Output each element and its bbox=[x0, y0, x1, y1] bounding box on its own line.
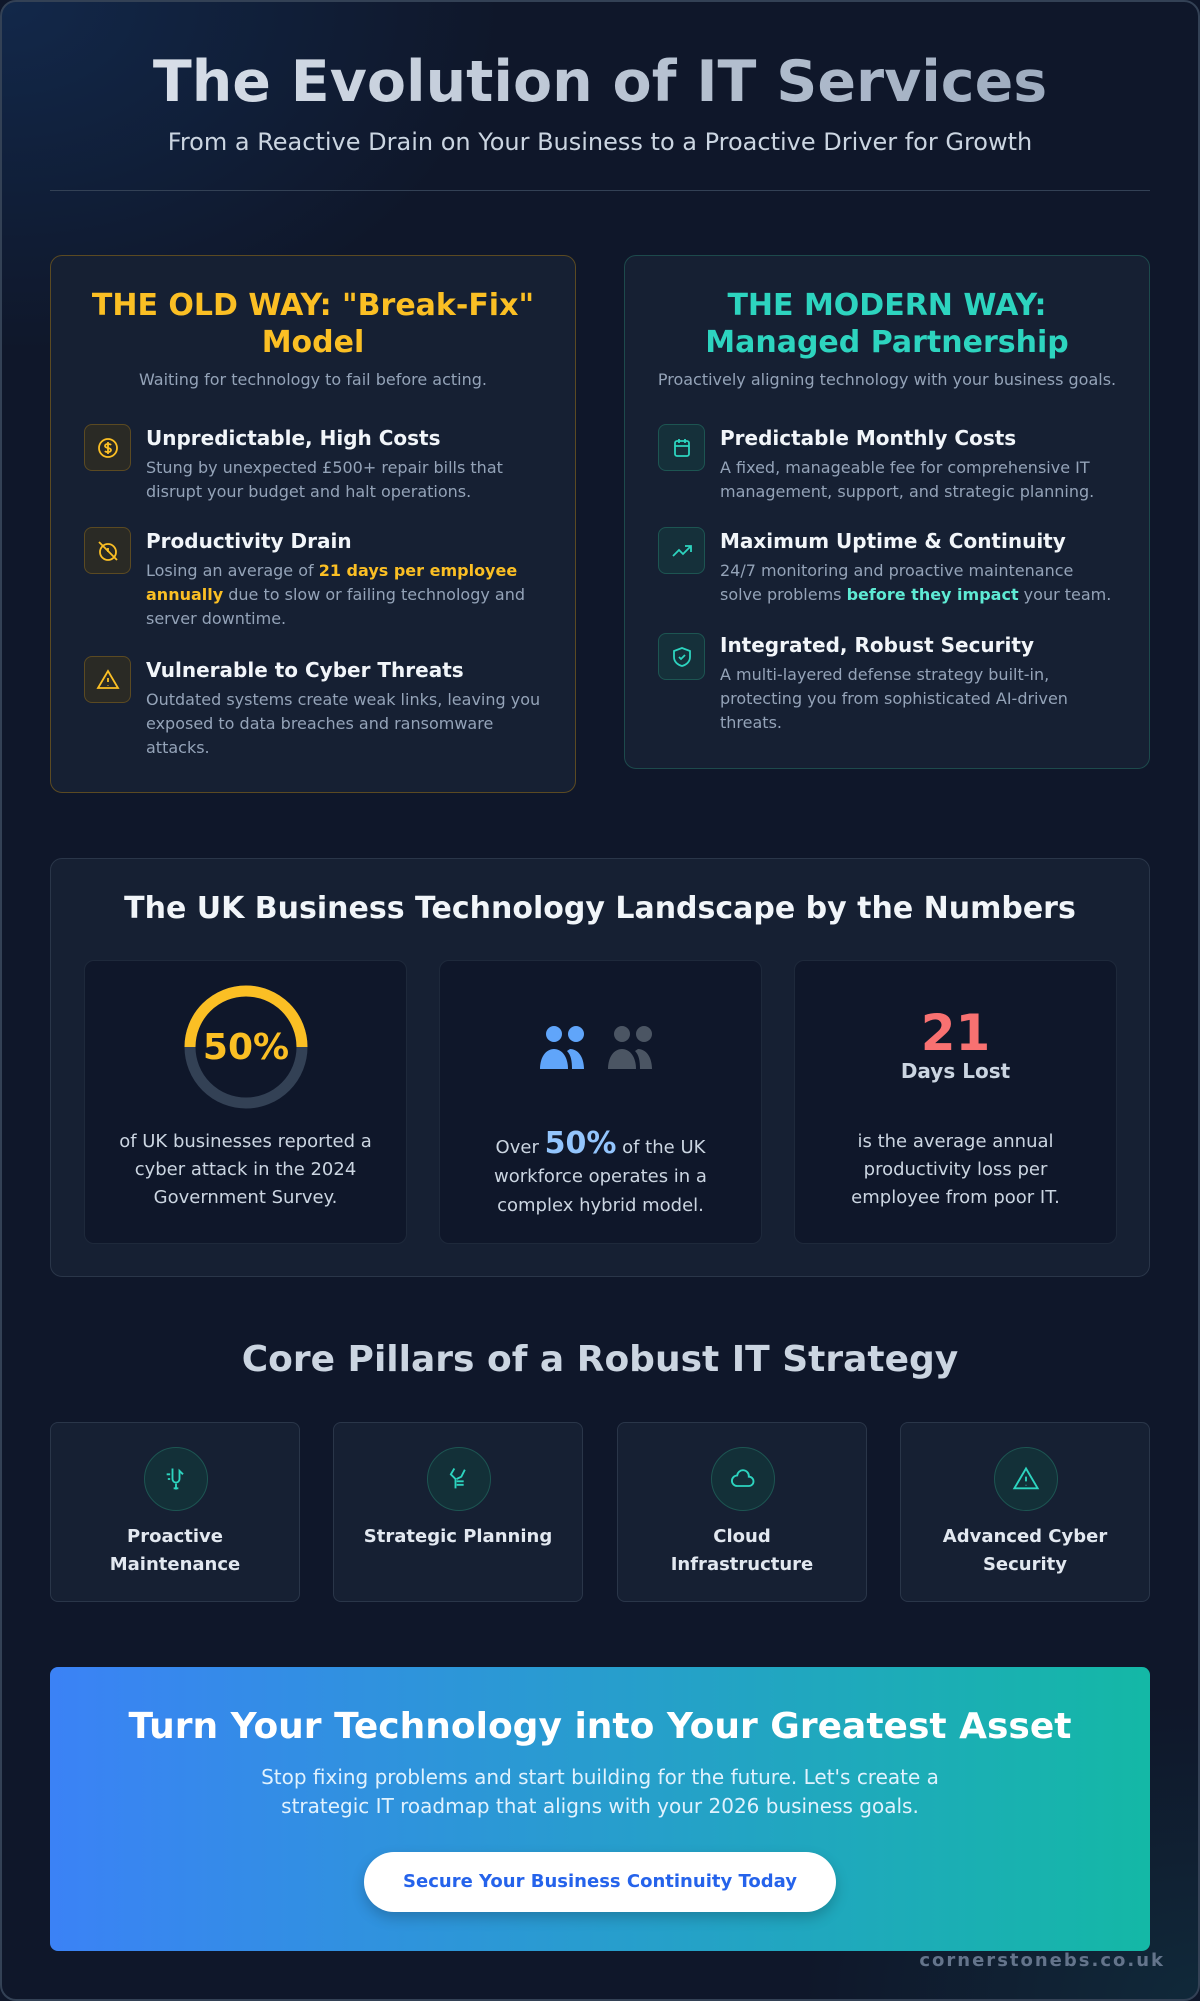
pillar: maintenance: Maintenance bbox=[110, 1554, 240, 1575]
item: productivity: Productivity Drain bbox=[146, 529, 352, 553]
icon: shield bbox=[658, 633, 705, 680]
button: Secure Your Business Continuity Today bbox=[403, 1871, 797, 1892]
heading: modern way: Managed Partnership bbox=[705, 325, 1069, 360]
cta text bbox=[261, 1765, 939, 1818]
stat card: cyber attack: cyber attack in the 2024 bbox=[135, 1159, 356, 1180]
pillar: cloud: Infrastructure bbox=[671, 1554, 813, 1575]
icon: dollar bbox=[84, 424, 131, 471]
item: threats: Vulnerable to Cyber Threats bbox=[146, 658, 464, 682]
panel: old way bbox=[50, 255, 576, 793]
panel: stats bbox=[50, 858, 1150, 1277]
icon: trend bbox=[658, 527, 705, 574]
item: security: Integrated, Robust Security bbox=[720, 633, 1034, 657]
cta title: Turn Your Technology into Your Greatest Asset bbox=[129, 1706, 1071, 1747]
panel: modern way: 24/7 monitoring and proactive maintenance bbox=[720, 561, 1073, 580]
stat card: days lost: productivity loss per bbox=[864, 1159, 1047, 1180]
heading: modern way: THE MODERN WAY: bbox=[727, 288, 1047, 323]
footer url: cornerstonebs.co.uk bbox=[919, 1950, 1165, 1971]
heading: stats: The UK Business Technology Landscape by the Numbers bbox=[124, 891, 1076, 926]
pillar: maintenance bbox=[50, 1422, 300, 1602]
stat card: hybrid: complex hybrid model. bbox=[497, 1195, 704, 1216]
panel: old way: Losing an average of 21 days per employee annually due to slow or failing technology and server downtime. bbox=[146, 561, 525, 628]
pillar: cloud: Cloud bbox=[713, 1526, 771, 1547]
pillar: security: Security bbox=[983, 1554, 1067, 1575]
stat card: days lost: is the average annual bbox=[857, 1131, 1054, 1152]
heading: old way: THE OLD WAY: "Break-Fix" bbox=[92, 288, 534, 323]
heading: modern way bbox=[705, 288, 1069, 360]
pillar: planning bbox=[333, 1422, 583, 1602]
stat card: hybrid: Over 50% of the UK bbox=[496, 1126, 705, 1161]
heading: old way: Model bbox=[262, 325, 364, 360]
panel: old way: Outdated systems create weak links, leaving you exposed to data breaches and ransomware attacks. bbox=[146, 690, 540, 757]
cta text: Stop fixing problems and start building for the future. Let's create a bbox=[261, 1765, 939, 1789]
pillar: planning: Strategic Planning bbox=[364, 1526, 552, 1547]
item: costs: Unpredictable, High Costs bbox=[146, 426, 441, 450]
stat card: cyber attack: of UK businesses reported a bbox=[119, 1131, 372, 1152]
stat card: hybrid: workforce operates in a bbox=[494, 1166, 707, 1187]
icon: clock off bbox=[84, 527, 131, 574]
stat card: hybrid bbox=[439, 960, 762, 1244]
heading: old way bbox=[92, 288, 534, 360]
pillar: security bbox=[900, 1422, 1150, 1602]
stat card: days lost: 21 bbox=[921, 1004, 990, 1062]
panel: modern way: A fixed, manageable fee for comprehensive IT management, support, and strategic planning. bbox=[720, 458, 1094, 501]
heading: core pillars: Core Pillars of a Robust IT Strategy bbox=[242, 1339, 958, 1380]
panel: modern way: solve problems before they impact your team. bbox=[720, 585, 1111, 604]
icon: calendar bbox=[658, 424, 705, 471]
pillar: security: Advanced Cyber bbox=[943, 1526, 1107, 1547]
subtext modern: Proactively aligning technology with your business goals. bbox=[658, 370, 1116, 389]
ring chart 50% bbox=[184, 986, 308, 1108]
item: monthly costs: Predictable Monthly Costs bbox=[720, 426, 1016, 450]
panel: old way: Stung by unexpected £500+ repair bills that disrupt your budget and halt operations. bbox=[146, 458, 503, 501]
stat card: days lost: employee from poor IT. bbox=[851, 1187, 1060, 1208]
stat card: days lost bbox=[794, 960, 1117, 1244]
stat card: days lost: Days Lost bbox=[901, 1059, 1010, 1083]
icon: warning bbox=[84, 656, 131, 703]
panel: modern way: A multi-layered defense strategy built-in, protecting you from sophisticated AI-driven threats. bbox=[720, 665, 1068, 732]
title bbox=[0, 44, 1200, 120]
button bbox=[364, 1852, 836, 1912]
subtext old: Waiting for technology to fail before acting. bbox=[139, 370, 487, 389]
subtitle: From a Reactive Drain on Your Business to a Proactive Driver for Growth bbox=[168, 128, 1032, 156]
title: The Evolution of IT Services bbox=[153, 49, 1047, 115]
cta text: strategic IT roadmap that aligns with your 2026 business goals. bbox=[281, 1794, 919, 1818]
pillar: cloud bbox=[617, 1422, 867, 1602]
pillar: maintenance: Proactive bbox=[127, 1526, 223, 1547]
stat card: cyber attack: Government Survey. bbox=[154, 1187, 337, 1208]
stat card: cyber attack bbox=[84, 960, 407, 1244]
cta banner bbox=[50, 1667, 1150, 1951]
ring chart 50%: 50% bbox=[203, 1027, 289, 1068]
panel: modern way bbox=[624, 255, 1150, 769]
item: uptime: Maximum Uptime & Continuity bbox=[720, 529, 1066, 553]
icon: people bbox=[540, 1026, 652, 1069]
